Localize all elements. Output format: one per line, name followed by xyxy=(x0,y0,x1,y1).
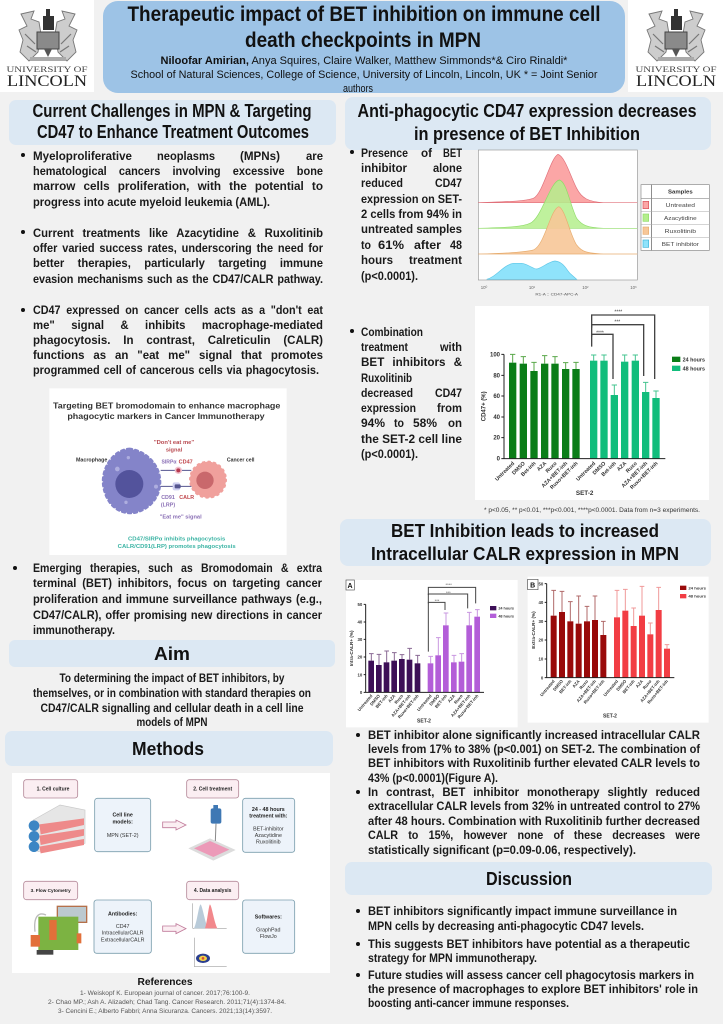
chart A: intra-CALR bars: *** xyxy=(446,590,451,595)
chart: CD47+ bars: AZA+BET-inh xyxy=(621,461,649,489)
chart: CD47+ bars: DMSO xyxy=(511,461,527,476)
chart A: intra-CALR bars: Ruxo+BET-inh xyxy=(457,693,480,719)
box treatment: BET-inhibitor xyxy=(253,826,284,832)
text block: discussion: This suggests BET inhibitors have potential as a therapeutic xyxy=(368,937,690,951)
chart B: extra-CALR bars: BET-inh xyxy=(558,678,573,695)
chart: CD47+ bars: Untreated xyxy=(575,461,597,483)
text block: CD47 bullet 1: CD47 xyxy=(435,176,462,190)
text block: challenges bullet 3: CD47 expressed on cancer cells acts as a "don't eat xyxy=(33,303,323,317)
chart A: intra-CALR bars: BET-inh xyxy=(374,693,389,709)
text block: challenges bullet 1: marrow cells proliferation, with the potential to xyxy=(33,179,323,193)
text block: challenges bullet 1: (MPNs) xyxy=(240,149,280,163)
text block: CD47 bullet 2: expression xyxy=(361,401,416,415)
text block: CD47 bullet 2: from xyxy=(437,401,462,415)
box antibodies: ExtracellularCALR xyxy=(101,937,145,943)
chart B: extra-CALR bars: DMSO xyxy=(615,678,628,692)
chart: CD47+ bars: 0 xyxy=(497,457,501,463)
step 2 cell treatment xyxy=(187,780,239,861)
box treatment: 24 - 48 hours xyxy=(252,807,285,813)
box treatment: Azacytidine xyxy=(255,833,282,839)
chart: CD47+ bars: **** xyxy=(614,309,622,315)
panel heading: discussion: Discussion xyxy=(486,869,572,889)
text block: challenges bullet 4: terminal (BET) inhibitors, focus on targeting cancer xyxy=(33,576,322,590)
legend: hours xyxy=(680,585,707,599)
text block: discussion xyxy=(356,904,698,1010)
box antibodies: CD47 xyxy=(116,924,130,930)
chart: CD47+ bars: 100 xyxy=(490,352,501,358)
chart: CD47+ bars: Bet-inh xyxy=(520,461,537,478)
chart A: intra-CALR bars: AZA xyxy=(387,693,397,703)
text block: CD47 bullet 1: 61% xyxy=(378,238,404,252)
logo: University of Lincoln left xyxy=(0,0,94,92)
chart B: extra-CALR bars: AZA+BET-inh xyxy=(575,678,597,703)
step 1 cell culture: 1. Cell culture xyxy=(37,787,70,793)
chart: CD47+ bars: Ruxo+BET-inh xyxy=(549,461,579,491)
chart B: extra-CALR bars: DMSO xyxy=(552,678,564,692)
box treatment xyxy=(243,798,295,852)
chart B: extra-CALR bars: Extra-CALR+ (%) xyxy=(531,611,536,649)
title banner: authors xyxy=(343,83,373,95)
logo: University of Lincoln right xyxy=(628,0,723,92)
significance brackets xyxy=(428,587,476,652)
text block: CD47 bullet 1 xyxy=(350,146,463,283)
badge A: A xyxy=(347,583,353,590)
chart A: intra-CALR bars: AZA xyxy=(447,693,457,703)
chart A: intra-CALR bars: Ruxo+BET-inh xyxy=(397,693,420,719)
chart A: intra-CALR bars: AZA+BET-inh xyxy=(390,693,412,718)
text block: challenges bullet 1: are xyxy=(306,149,323,163)
text block: CALR results: levels from 17% to 38% (p<0.001) on SET-2. The combination of xyxy=(368,742,701,756)
chart: CD47+ bars: DMSO xyxy=(592,461,607,476)
text block: discussion: Future studies will assess cancer cell phagocytosis markers in xyxy=(368,968,694,982)
text block: CALR results: In contrast, BET inhibitor monotherapy slightly reduced xyxy=(368,785,700,799)
legend: samples xyxy=(641,185,709,250)
panel heading: current challenges xyxy=(9,100,336,145)
text block: CD47 bullet 1: treatment xyxy=(409,253,462,267)
step 4 data analysis: 4. Data analysis xyxy=(194,888,232,894)
arrow step 1 to 2 xyxy=(163,820,186,830)
chart B: extra-CALR bars: 40 xyxy=(539,600,544,605)
text block: aim xyxy=(33,671,311,729)
figure: BET bromodomain macrophage diagram: CD47 xyxy=(179,460,193,466)
legend: hours xyxy=(490,606,515,618)
text block: CD47 bullet 1: after xyxy=(414,238,441,252)
references: 2- Chao MP.; Ash A. Alizadeh; Chad Tang. Cancer Research. 2011;71(4):1374-84. xyxy=(48,999,286,1006)
panel heading: methods xyxy=(5,731,333,766)
chart A: intra-CALR bars: BET-inh xyxy=(434,693,448,709)
references: 3- Cencini E.; Alberto Fabbri; Anna Sicuranza. Cancers. 2021;13(14):3597. xyxy=(58,1008,272,1015)
figure: BET bromodomain macrophage diagram: CD91 xyxy=(161,495,175,501)
text block: discussion: strategy for MPN immunotherapy. xyxy=(368,951,537,965)
text block: challenges bullet 2: better therapies, particularly targeting immune xyxy=(33,256,323,270)
text block: CD47 bullet 2: Ruxolitinib xyxy=(361,371,412,385)
chart A: intra-CALR bars: Ruxo xyxy=(453,693,464,705)
legend: hours xyxy=(672,357,705,372)
text block: CD47 bullet 1: Presence xyxy=(361,146,408,160)
chart A: intra-CALR bars: **** xyxy=(446,582,452,587)
text block: challenges bullet 4: proliferation and immune surveillance pathways (e.g., xyxy=(33,592,322,606)
chart A: intra-CALR bars: Intra-CALR+ (%) xyxy=(349,630,354,666)
figure: BET bromodomain macrophage diagram: Cancer cell xyxy=(227,458,255,464)
figure: methods workflow xyxy=(12,773,330,973)
chart A: intra-CALR bars: Ruxo xyxy=(393,693,404,705)
chart A: intra-CALR bars: 30 xyxy=(358,637,363,642)
figure: BET bromodomain macrophage diagram xyxy=(49,388,287,555)
chart: CD47 flow histogram: 10¹ xyxy=(529,285,536,290)
chart B: extra-CALR bars: AZA+BET-inh xyxy=(639,678,661,703)
figure: BET bromodomain macrophage diagram: phagocytic markers in Cancer Immunotherapy xyxy=(67,411,265,421)
logo: University of Lincoln left: LINCOLN xyxy=(7,73,87,90)
panel heading: anti-phagocytic CD47 xyxy=(345,97,711,150)
figure: BET bromodomain macrophage diagram: CALR/CD91(LRP) promotes phagocytosis xyxy=(118,544,236,550)
chart B: extra-CALR bars: SET-2 xyxy=(603,714,617,720)
text block: challenges bullet 2: Current treatments like Azacytidine & Ruxolitinib xyxy=(33,226,323,240)
chart B: extra-CALR bars: Ruxo xyxy=(642,678,653,690)
chart B: extra-CALR bars: BET-inh xyxy=(621,678,636,695)
text block: discussion: MPN cells by decreasing anti-phagocytic CD47 levels. xyxy=(368,919,644,933)
chart: CD47+ bars xyxy=(475,306,709,500)
text block: CALR results: extracellular CALR levels from 32% in untreated control to 27% xyxy=(368,799,700,813)
box antibodies xyxy=(94,900,151,953)
legend: hours: 48 hours xyxy=(688,594,707,599)
arrow step 3 to 4 xyxy=(163,924,186,934)
text block: challenges bullet 4: CD47/CALR), offer promising new directions in cancer xyxy=(33,608,322,622)
chart B: extra-CALR bars: 20 xyxy=(539,638,544,643)
text block: CD47 bullet 2: (p<0.0001). xyxy=(361,447,418,461)
text block: CALR results: BET inhibitor alone significantly increased intracellular CALR xyxy=(368,728,700,742)
text block: CD47 bullet 2: to xyxy=(394,416,404,430)
chart: CD47+ bars: Ruxo+BET-inh xyxy=(629,461,659,491)
box cell line models xyxy=(95,798,151,852)
panel heading: intracellular CALR: Intracellular CALR expression in MPN xyxy=(371,544,679,564)
box treatment: treatment with: xyxy=(249,814,288,820)
title banner: Niloofar Amirian, Anya Squires, Claire Walker, Matthew Simmonds*& Ciro Rinaldi* xyxy=(160,55,568,67)
figure: BET bromodomain macrophage diagram: CALR xyxy=(179,495,194,501)
badge B: B xyxy=(530,582,535,589)
logo: University of Lincoln right: UNIVERSITY OF xyxy=(636,65,717,74)
chart B: extra-CALR bars: 10 xyxy=(539,657,544,662)
figure: BET bromodomain macrophage diagram: Targeting BET bromodomain to enhance macrophage xyxy=(53,400,281,410)
chart: CD47+ bars: Ruxo xyxy=(545,460,559,475)
chart A: intra-CALR bars: Untreated xyxy=(416,693,433,712)
chart: CD47+ bars: 40 xyxy=(493,415,501,421)
text block: CD47 bullet 1: (p<0.0001). xyxy=(361,269,418,283)
panel heading: aim xyxy=(9,640,335,667)
figure: BET bromodomain macrophage diagram: SIRPα xyxy=(162,460,177,466)
figure: BET bromodomain macrophage diagram: "Don't eat me" xyxy=(154,440,194,446)
legend: samples: Ruxolitinib xyxy=(665,229,696,235)
logo: University of Lincoln left: UNIVERSITY OF xyxy=(6,65,88,74)
box softwares: GraphPad xyxy=(256,927,281,933)
chart: CD47+ bars: Bet-inh xyxy=(601,461,618,478)
legend: hours: 48 hours xyxy=(498,613,515,618)
chart B: extra-CALR bars: Untreated xyxy=(539,678,556,697)
text block: CD47 bullet 1: alone xyxy=(433,161,462,175)
chart: CD47+ bars: 80 xyxy=(493,373,501,379)
text block: discussion: boosting anti-cancer immune responses. xyxy=(368,996,569,1010)
box cell line models: Cell line xyxy=(112,813,133,819)
badge A xyxy=(346,580,354,590)
chart: CD47 flow histogram: 10² xyxy=(582,285,589,290)
figure: BET bromodomain macrophage diagram: CD47/SIRPα inhibits phagocytosis xyxy=(128,536,225,542)
text block: CD47 bullet 1: expression on SET- xyxy=(361,192,462,206)
text block: CD47 bullet 2: decreased xyxy=(361,386,413,400)
text block: CALR results xyxy=(356,728,701,857)
text block: challenges bullet 2: evasion mechanisms such as the CD47/CALR pathway. xyxy=(33,272,323,286)
chart: CD47+ bars: SET-2 xyxy=(576,490,594,497)
panel heading: discussion xyxy=(345,862,712,895)
box cell line models: models: xyxy=(112,820,133,826)
chart: CD47+ bars: *** xyxy=(614,320,620,326)
panel heading: intracellular CALR: BET Inhibition leads to increased xyxy=(391,521,659,541)
chart: CD47+ bars: 20 xyxy=(493,436,501,442)
legend: hours: 24 hours xyxy=(683,357,705,363)
text block: CALR results: after 48 hours. Combination with Ruxolitinib further decreased xyxy=(368,814,700,828)
chart: CD47+ bars: Untreated xyxy=(494,461,516,483)
figure: BET bromodomain macrophage diagram: (LRP) xyxy=(161,502,175,508)
text block: CD47 bullet 1: inhibitor xyxy=(361,161,407,175)
chart A: intra-CALR bars: Untreated xyxy=(357,693,374,712)
chart: CD47 flow histogram xyxy=(478,150,709,297)
chart B: extra-CALR bars: 0 xyxy=(541,675,544,680)
text block: CALR results: 43% (p<0.0001)(Figure A). xyxy=(368,771,498,785)
text block: challenges bullet 1: Myeloproliferative xyxy=(33,149,132,163)
text block: challenges bullet 3: functions as an "eat me" signal that promotes xyxy=(33,348,323,362)
text block: challenges bullet 2 xyxy=(21,226,323,286)
legend: samples: Samples xyxy=(668,190,693,196)
chart A: intra-CALR bars: *** xyxy=(435,598,440,603)
chart A: intra-CALR bars: 20 xyxy=(358,655,363,660)
box cell line models: MPN (SET-2) xyxy=(107,833,139,839)
legend: samples: BET inhibitor xyxy=(662,242,699,248)
panel heading: anti-phagocytic CD47: in presence of BET Inhibition xyxy=(414,124,640,144)
text block: challenges bullet 1: neoplasms xyxy=(157,149,215,163)
chart: CD47 flow histogram: R1-A :: CD47-APC-A xyxy=(535,292,578,297)
legend: hours: 48 hours xyxy=(683,366,705,372)
title banner: Therapeutic impact of BET inhibition on immune cell xyxy=(128,3,600,26)
chart B: extra-CALR bars: Ruxo+BET-inh xyxy=(583,678,606,705)
panel heading: current challenges: Current Challenges in MPN & Targeting xyxy=(32,101,312,121)
title banner: School of Natural Sciences, College of Science, University of Lincoln, Lincoln, UK * = Joint Senior xyxy=(130,69,598,81)
text block: CD47 bullet 2: Combination xyxy=(361,325,423,339)
chart: CD47 flow histogram: 10³ xyxy=(630,285,637,290)
text block: aim: To determining the impact of BET inhibitors, by xyxy=(60,671,285,685)
text block: CALR results: BET inhibitors with Ruxolitinib further elevated CALR levels to xyxy=(368,756,700,770)
chart A: intra-CALR bars: AZA+BET-inh xyxy=(450,693,472,718)
text block: challenges bullet 3 xyxy=(21,303,323,377)
references: 1- Weiskopf K. European journal of cancer. 2017;76:100-9. xyxy=(80,990,250,997)
text block: challenges bullet 3: phagocytosis. In contrast, Calreticulin (CALR) xyxy=(33,333,323,347)
text block: CD47 bullet 2: BET inhibitors & xyxy=(361,355,462,369)
chart: CD47+ bars: Ruxo xyxy=(625,460,639,475)
chart B: extra-CALR bars: 50 xyxy=(539,581,544,586)
title banner: death checkpoints in MPN xyxy=(245,29,481,52)
text block: CD47 bullet 1: reduced xyxy=(361,176,403,190)
step 1 cell culture xyxy=(24,780,85,853)
chart B: extra-CALR bars: 30 xyxy=(539,619,544,624)
chart: CD47+ bars: CD47+ (%) xyxy=(481,391,487,421)
text block: CALR results: statistically significant (p=0.09-0.06, respectively). xyxy=(368,843,636,857)
text block: CD47 bullet 1: to xyxy=(361,238,371,252)
references: References xyxy=(138,976,193,988)
box antibodies: Antibodies: xyxy=(108,912,138,918)
text block: aim: CD47/CALR signalling and cellular death in a cell line xyxy=(40,701,304,715)
chart: CD47+ bars: **** xyxy=(596,330,604,336)
chart B: extra-CALR bars: Ruxo xyxy=(578,678,589,690)
significance brackets xyxy=(592,315,655,379)
text block: discussion: BET inhibitors significantly impact immune surveillance in xyxy=(368,904,677,918)
box softwares: FlowJo xyxy=(260,934,277,940)
text block: challenges bullet 3: programmed cell of cancerous cells via phagocytosis. xyxy=(33,363,319,377)
panel heading: methods: Methods xyxy=(132,739,204,759)
chart A: intra-CALR bars: 40 xyxy=(358,620,363,625)
text block: CD47 bullet 1: 2 cells from 94% in xyxy=(361,207,462,221)
figure: BET bromodomain macrophage diagram: "Eat me" signal xyxy=(160,515,202,521)
step 2 cell treatment: 2. Cell treatment xyxy=(193,787,232,793)
chart A: intra-CALR bars: 50 xyxy=(358,602,363,607)
logo: University of Lincoln right: LINCOLN xyxy=(636,73,716,90)
text block: CD47 bullet 1: 48 xyxy=(450,238,462,252)
text block: aim: models of MPN xyxy=(136,715,208,729)
chart B: extra-CALR bars: Untreated xyxy=(602,678,619,697)
chart: CD47+ bars: AZA+BET-inh xyxy=(541,461,569,489)
chart B: extra-CALR bars: Ruxo+BET-inh xyxy=(646,678,669,705)
legend: samples: Azacytidine xyxy=(664,216,697,222)
chart: CD47+ bars: AZA xyxy=(616,461,628,473)
box softwares xyxy=(243,900,295,953)
text block: CD47 bullet 1: BET xyxy=(443,146,463,160)
references xyxy=(48,976,286,1015)
chart A: intra-CALR bars: DMSO xyxy=(369,693,381,707)
text block: challenges bullet 1 xyxy=(21,149,323,209)
chart A: intra-CALR bars xyxy=(346,580,518,727)
text block: CD47 bullet 1: untreated samples xyxy=(361,222,462,236)
badge B xyxy=(528,579,538,590)
text block: challenges bullet 4: immunotherapy. xyxy=(33,623,115,637)
figure: BET bromodomain macrophage diagram: signal xyxy=(166,447,183,453)
step 3 flow cytometry: 3. Flow Cytometry xyxy=(31,888,71,893)
text block: challenges bullet 1: hematological cancers involving excessive bone xyxy=(33,164,323,178)
box treatment: Ruxolitinib xyxy=(256,840,281,846)
chart: CD47+ bars: AZA xyxy=(536,461,548,473)
text block: CD47 bullet 2: on xyxy=(448,416,462,430)
footnote: p values: * p<0.05, ** p<0.01, ***p<0.001, ****p<0.0001. Data from n=3 experiments. xyxy=(484,507,700,514)
chart A: intra-CALR bars: 0 xyxy=(360,690,363,695)
step 3 flow cytometry xyxy=(24,881,87,955)
text block: challenges bullet 4: Emerging therapies, such as Bromodomain & extra xyxy=(33,561,322,575)
legend: samples: Untreated xyxy=(666,203,695,209)
text block: CD47 bullet 2: with xyxy=(439,340,462,354)
box antibodies: IntracellularCALR xyxy=(102,931,144,937)
text block: challenges bullet 1: progress into acute myeloid leukemia (AML). xyxy=(33,195,270,209)
legend: hours: 24 hours xyxy=(498,606,515,611)
chart A: intra-CALR bars: DMSO xyxy=(428,693,441,707)
chart B: extra-CALR bars: AZA xyxy=(571,678,581,689)
text block: CD47 bullet 2: treatment xyxy=(361,340,408,354)
legend: hours: 24 hours xyxy=(688,585,707,590)
text block: challenges bullet 2: offer varied success rates, underscoring the need for xyxy=(33,241,323,255)
step 4 data analysis xyxy=(187,881,239,967)
text block: CD47 bullet 2 xyxy=(350,325,462,461)
text block: CD47 bullet 1: hours xyxy=(361,253,393,267)
box softwares: Softwares: xyxy=(255,915,282,921)
text block: aim: themselves, or in combination with standard therapies on xyxy=(33,686,311,700)
panel heading: intracellular CALR xyxy=(340,519,711,566)
text block: CD47 bullet 2: 58% xyxy=(413,416,437,430)
text block: CD47 bullet 2: the SET-2 cell line xyxy=(361,432,462,446)
text block: challenges bullet 3: me" signal & inhibits macrophage-mediated xyxy=(33,318,323,332)
text block: CD47 bullet 2: CD47 xyxy=(435,386,462,400)
chart B: extra-CALR bars xyxy=(528,577,709,723)
panel heading: current challenges: CD47 to Enhance Treatment Outcomes xyxy=(37,122,309,142)
text block: CD47 bullet 1: of xyxy=(421,146,433,160)
figure: BET bromodomain macrophage diagram: Macrophage xyxy=(76,458,107,464)
chart: CD47 flow histogram: 10⁰ xyxy=(481,285,488,290)
chart A: intra-CALR bars: SET-2 xyxy=(417,718,431,724)
chart A: intra-CALR bars: 10 xyxy=(358,672,363,677)
panel heading: aim: Aim xyxy=(154,644,190,664)
text block: challenges bullet 4 xyxy=(13,561,322,637)
chart: CD47+ bars: 60 xyxy=(493,394,501,400)
chart B: extra-CALR bars: AZA xyxy=(635,678,645,689)
text block: CD47 bullet 2: 94% xyxy=(361,416,385,430)
title banner xyxy=(103,1,625,95)
text block: discussion: the presence of macrophages to explore BET inhibitors' role in xyxy=(368,982,698,996)
